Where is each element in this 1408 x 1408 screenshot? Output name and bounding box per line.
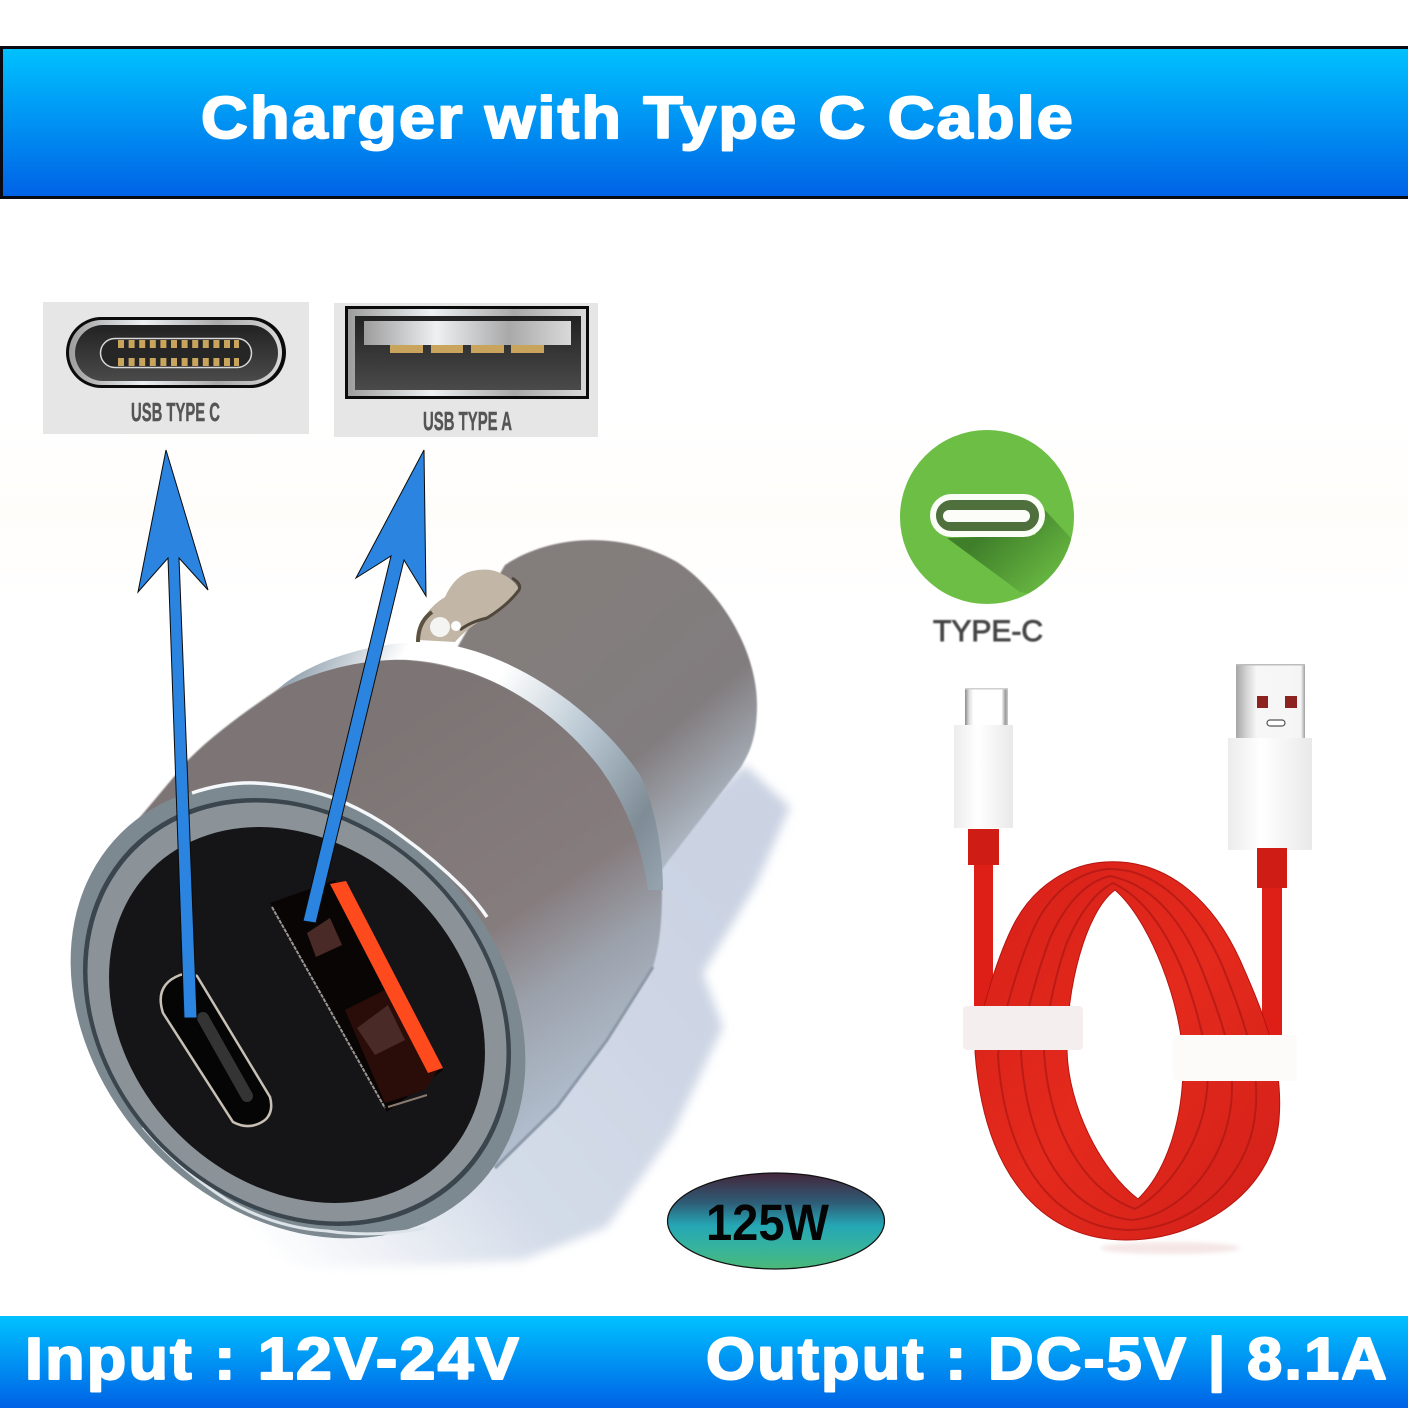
- black face disc: [33, 751, 561, 1279]
- USB-A port on charger: [270, 880, 443, 1112]
- panel: USB type C port: [43, 302, 309, 434]
- rear barrel: [450, 540, 757, 900]
- orange LED bar: [330, 881, 443, 1073]
- gold contact pads: [390, 345, 544, 353]
- badge: 125W: 125W: [706, 1194, 830, 1251]
- car charger photo illustration: [0, 540, 790, 1331]
- title: Charger with Type C Cable: [201, 85, 1075, 151]
- USB-A plug: [1228, 664, 1312, 888]
- gold contact pins: [118, 340, 239, 366]
- left cable stem: [974, 860, 993, 1010]
- white cable strap right: [1173, 1035, 1297, 1081]
- white cable strap left: [963, 1006, 1083, 1050]
- arrow: to USB type C: [138, 450, 208, 1018]
- face rim: [0, 691, 618, 1331]
- label: USB TYPE C: USB TYPE C: [131, 397, 220, 427]
- input spec: Input : 12V-24V: [25, 1326, 521, 1392]
- coiled cable: [975, 862, 1280, 1240]
- charger tip: [418, 570, 520, 642]
- output spec: Output : DC-5V | 8.1A: [706, 1326, 1389, 1393]
- type-C plug: [954, 688, 1013, 865]
- label: TYPE-C: TYPE-C: [933, 615, 1043, 648]
- USB-C port on charger: [161, 974, 271, 1126]
- label: USB TYPE A: USB TYPE A: [423, 406, 512, 436]
- badge: 125W: [668, 1173, 884, 1269]
- panel: USB type A port: [334, 303, 598, 437]
- arrow: to USB type A: [303, 450, 426, 923]
- footer banner: [0, 1316, 1408, 1408]
- title banner: [2, 48, 1408, 198]
- right cable stem: [1262, 880, 1282, 1040]
- icon: green Type-C badge: [900, 430, 1080, 648]
- collar ring: [277, 642, 663, 890]
- front barrel: [125, 659, 662, 1168]
- red Type-C cable: [954, 664, 1312, 1254]
